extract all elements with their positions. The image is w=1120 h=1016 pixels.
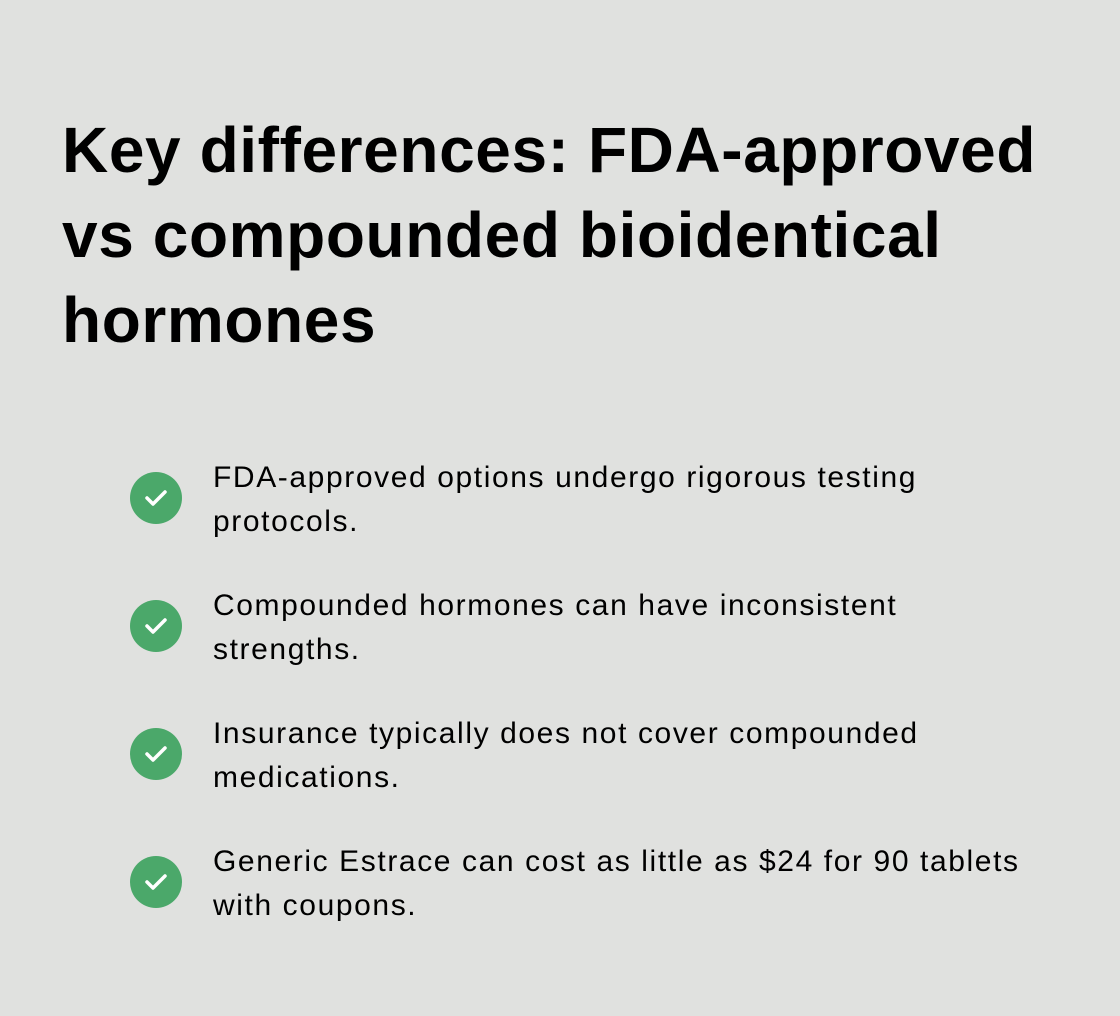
text: protocols. — [213, 505, 359, 538]
text — [213, 717, 919, 794]
title: vs compounded bioidentical — [62, 199, 942, 271]
icon: check — [130, 472, 182, 524]
text — [213, 589, 897, 666]
icon: check — [130, 600, 182, 652]
text: strengths. — [213, 633, 361, 666]
icon: check — [130, 856, 182, 908]
title — [62, 114, 1036, 356]
text — [213, 845, 1020, 922]
icon: check — [130, 728, 182, 780]
item: insurance — [130, 717, 919, 794]
text: Compounded hormones can have inconsistent — [213, 589, 897, 622]
item: testing — [130, 461, 917, 538]
text — [213, 461, 917, 538]
title: Key differences: FDA-approved — [62, 114, 1036, 186]
text: Insurance typically does not cover compounded — [213, 717, 919, 750]
text: with coupons. — [213, 889, 417, 922]
text: FDA-approved options undergo rigorous testing — [213, 461, 917, 494]
text: medications. — [213, 761, 401, 794]
text: Generic Estrace can cost as little as $24 for 90 tablets — [213, 845, 1020, 878]
item: cost — [130, 845, 1020, 922]
item: strengths — [130, 589, 897, 666]
title: hormones — [62, 284, 376, 356]
